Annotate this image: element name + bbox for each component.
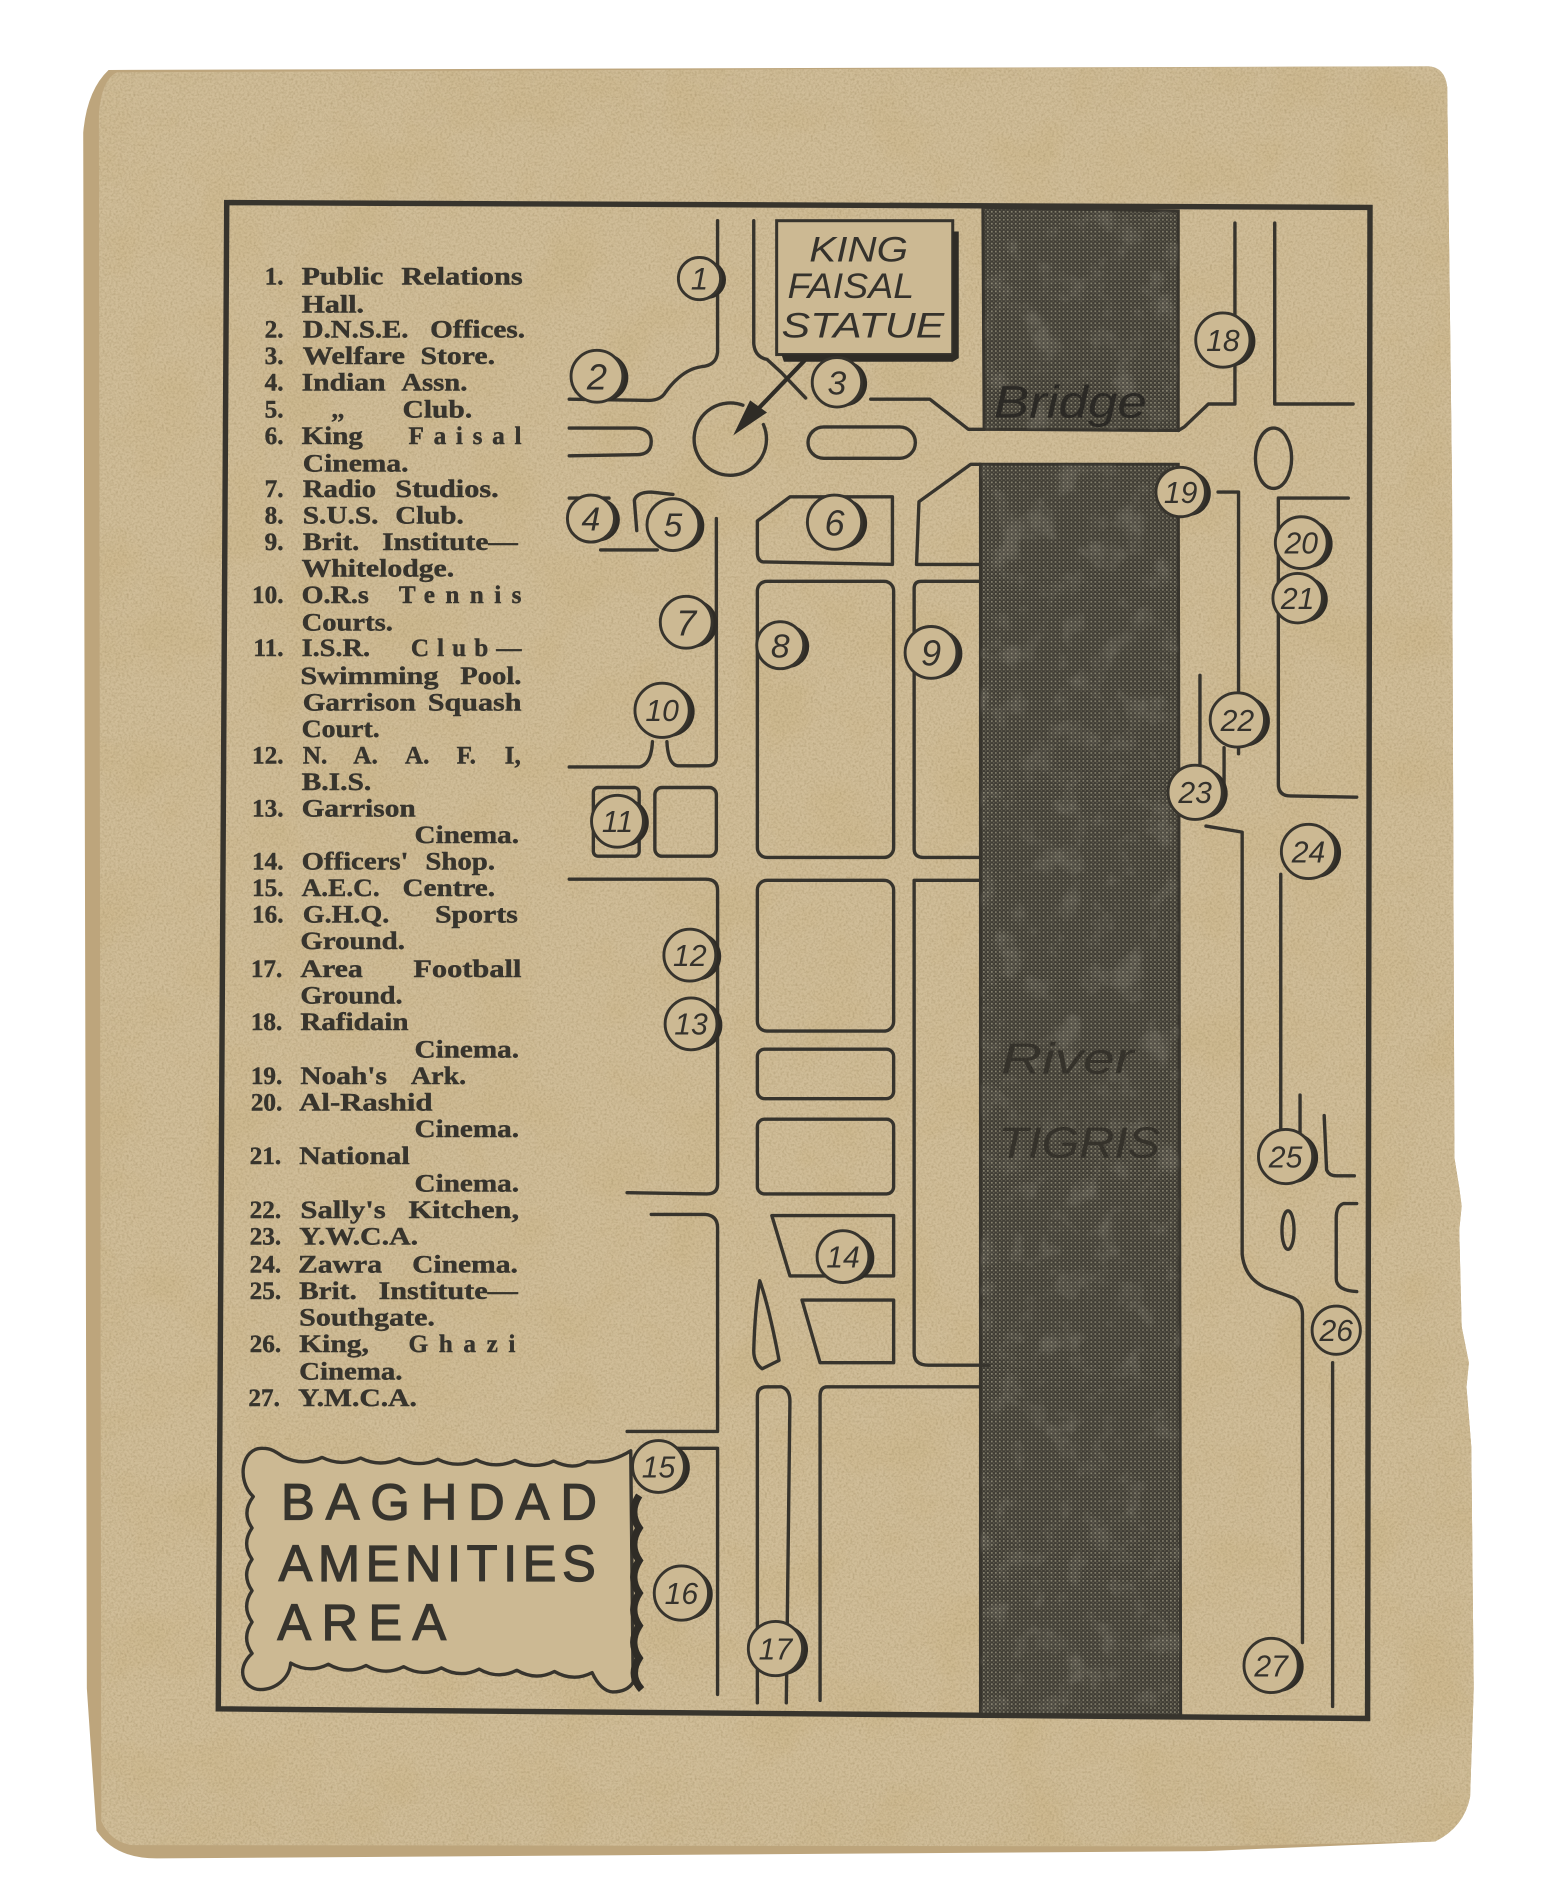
marker 7: 7: [676, 603, 698, 644]
marker 24: 24: [1291, 836, 1325, 869]
entry 9: Whitelodge.: [302, 554, 454, 582]
entry 21: Cinema.: [415, 1169, 519, 1198]
entry 1: Relations: [401, 263, 523, 291]
marker 12: [664, 929, 721, 981]
marker 24: [1281, 824, 1341, 879]
marker 23: 23: [1177, 777, 1212, 810]
legend of amenities: [248, 263, 525, 1412]
marker 3: 3: [828, 364, 847, 402]
entry 11: Club—: [411, 634, 522, 662]
marker 19: [1156, 467, 1211, 517]
entry 6: 6.: [265, 422, 284, 450]
entry 16: G.H.Q.: [303, 901, 389, 929]
marker 14: 14: [826, 1241, 860, 1274]
marker 20: 20: [1283, 528, 1318, 561]
marker 26: [1312, 1306, 1360, 1354]
entry 11: Pool.: [460, 662, 521, 690]
marker 4: 4: [582, 501, 600, 539]
entry 14: 14.: [252, 847, 284, 876]
marker 3: [812, 358, 867, 407]
marker 16: [654, 1566, 713, 1620]
marker 18: 18: [1206, 325, 1240, 358]
entry 19: Noah's: [300, 1062, 387, 1090]
marker 19: 19: [1164, 477, 1198, 510]
entry 19: 19.: [251, 1062, 282, 1090]
marker 10: [635, 683, 695, 737]
marker 6: 6: [824, 502, 845, 543]
entry 5: Club.: [403, 395, 472, 423]
entry 27: Y.M.C.A.: [298, 1384, 417, 1412]
entry 13: Cinema.: [415, 821, 519, 849]
river wear marks: [977, 205, 1188, 1722]
entry 17: Football: [413, 955, 521, 983]
King Faisal Statue sign: [777, 221, 959, 362]
entry 7: 7.: [265, 475, 284, 503]
marker 13: 13: [674, 1009, 708, 1042]
marker 1: 1: [691, 261, 708, 296]
marker 8: [757, 622, 809, 669]
entry 10: Tennis: [399, 581, 522, 609]
marker 17: [748, 1621, 808, 1676]
entry 20: 20.: [251, 1089, 282, 1117]
entry 3: 3.: [265, 342, 284, 370]
entry 5: ,,: [332, 395, 344, 423]
arrow to King Faisal statue: [733, 359, 806, 435]
entry 25: 25.: [250, 1277, 281, 1305]
entry 9: 9.: [265, 528, 284, 556]
entry 26: Cinema.: [299, 1358, 403, 1386]
marker 17: 17: [759, 1633, 793, 1666]
entry 18: Cinema.: [415, 1036, 519, 1064]
marker 21: [1273, 573, 1328, 623]
entry 11: Swimming: [300, 662, 439, 690]
entry 14: Shop.: [425, 847, 495, 876]
entry 12: F.: [457, 741, 476, 769]
entry 21: National: [299, 1142, 410, 1170]
marker 27: [1244, 1638, 1304, 1693]
King Faisal Statue sign: FAISAL: [788, 267, 914, 306]
entry 4: Indian: [302, 369, 386, 397]
entry 11: Court.: [302, 715, 380, 743]
entry 8: 8.: [265, 501, 284, 529]
title box: Baghdad Amenities Area: AREA: [277, 1594, 446, 1651]
marker 9: 9: [921, 633, 941, 674]
entry 12: I,: [505, 741, 521, 769]
entry 2: Offices.: [430, 316, 525, 344]
street map lines: [569, 221, 1357, 1706]
entry 25: Institute—: [378, 1277, 519, 1305]
marker 13: [665, 998, 722, 1050]
marker 6: [807, 495, 867, 549]
marker 1: [678, 257, 726, 300]
entry 17: 17.: [251, 955, 282, 983]
entry 16: Ground.: [300, 927, 405, 955]
river Tigris lower section: [980, 464, 1181, 1717]
entry 6: Cinema.: [303, 449, 409, 478]
marker 5: [647, 499, 704, 551]
entry 12: B.I.S.: [302, 768, 371, 796]
marker 16: 16: [665, 1578, 698, 1611]
label: River: River: [1001, 1035, 1136, 1083]
title box: Baghdad Amenities Area: AMENITIES: [279, 1535, 596, 1592]
entry 25: Brit.: [299, 1277, 357, 1305]
entry 7: Radio: [303, 475, 376, 503]
entry 19: Ark.: [411, 1062, 466, 1090]
entry 22: Sally's: [300, 1196, 386, 1224]
marker 18: [1196, 313, 1255, 367]
entry 3: Welfare: [303, 342, 405, 370]
entry 12: A.: [353, 741, 378, 769]
entry 2: 2.: [265, 316, 284, 344]
entry 21: 21.: [250, 1142, 281, 1170]
marker 14: [817, 1231, 874, 1283]
entry 8: Club.: [395, 501, 464, 529]
marker 15: [633, 1441, 690, 1492]
entry 20: Cinema.: [415, 1115, 519, 1143]
entry 23: 23.: [250, 1223, 281, 1251]
marker 27: 27: [1253, 1650, 1289, 1683]
marker 26: 26: [1318, 1315, 1353, 1348]
entry 11: 11.: [253, 634, 284, 662]
entry 15: Centre.: [403, 874, 495, 902]
entry 11: Garrison: [303, 688, 416, 716]
marker 10: 10: [645, 695, 679, 728]
entry 24: 24.: [250, 1250, 281, 1278]
entry 4: Assn.: [401, 369, 467, 397]
entry 17: Area: [300, 955, 363, 983]
entry 14: Officers': [302, 847, 409, 876]
entry 22: Kitchen,: [409, 1196, 519, 1224]
entry 24: Cinema.: [412, 1250, 518, 1278]
marker 25: 25: [1268, 1141, 1303, 1174]
entry 6: King: [302, 422, 363, 450]
entry 11: Squash: [428, 688, 521, 716]
entry 16: Sports: [435, 901, 518, 929]
marker 7: [660, 596, 718, 648]
entry 4: 4.: [265, 369, 284, 397]
entry 27: 27.: [248, 1384, 280, 1412]
entry 26: Ghazi: [409, 1330, 515, 1358]
map outer frame: [218, 203, 1370, 1719]
marker 2: [571, 350, 628, 402]
entry 6: Faisal: [409, 422, 521, 450]
entry 1: 1.: [265, 263, 284, 291]
entry 12: 12.: [252, 741, 284, 769]
entry 17: Ground.: [300, 981, 403, 1009]
entry 7: Studios.: [395, 475, 499, 503]
label: Bridge: Bridge: [994, 376, 1147, 427]
marker 12: 12: [673, 940, 707, 973]
entry 2: D.N.S.E.: [303, 316, 409, 344]
marker 22: [1210, 693, 1270, 747]
marker 21: 21: [1280, 583, 1314, 616]
marker 11: 11: [602, 806, 633, 839]
entry 15: A.E.C.: [302, 874, 380, 902]
marker 25: [1258, 1129, 1318, 1184]
entry 9: Institute—: [382, 528, 519, 556]
title box: Baghdad Amenities Area: [243, 1448, 642, 1692]
marker 8: 8: [771, 627, 790, 665]
label: Tigris: TIGRIS: [999, 1120, 1160, 1168]
marker 20: [1275, 517, 1333, 569]
entry 12: A.: [405, 741, 429, 769]
entry 23: Y.W.C.A.: [299, 1223, 418, 1251]
entry 10: 10.: [252, 581, 284, 609]
entry 13: 13.: [252, 794, 284, 822]
entry 5: 5.: [265, 395, 284, 423]
King Faisal Statue sign: KING: [809, 231, 908, 270]
marker 15: 15: [642, 1451, 675, 1484]
entry 20: Al-Rashid: [299, 1089, 433, 1117]
entry 1: Public: [302, 263, 383, 291]
entry 10: Courts.: [302, 609, 393, 637]
marker 11: [592, 795, 649, 847]
title box: Baghdad Amenities Area: BAGHDAD: [281, 1474, 597, 1531]
river Tigris upper section: [983, 207, 1178, 431]
entry 18: 18.: [251, 1008, 282, 1036]
entry 15: 15.: [252, 874, 284, 902]
marker 4: [567, 495, 620, 542]
entry 18: Rafidain: [300, 1008, 409, 1036]
entry 8: S.U.S.: [303, 501, 378, 529]
entry 16: 16.: [252, 901, 284, 929]
King Faisal Statue sign: STATUE: [781, 307, 945, 346]
entry 11: I.S.R.: [302, 634, 370, 662]
entry 3: Store.: [421, 342, 495, 370]
entry 9: Brit.: [303, 528, 359, 556]
entry 1: Hall.: [302, 290, 364, 318]
marker 9: [905, 627, 962, 678]
marker 22: 22: [1220, 705, 1254, 738]
entry 24: Zawra: [298, 1250, 383, 1278]
entry 13: Garrison: [302, 794, 416, 822]
entry 25: Southgate.: [299, 1303, 435, 1331]
marker 5: 5: [664, 507, 683, 545]
entry 26: 26.: [250, 1330, 281, 1358]
marker 23: [1168, 765, 1228, 819]
entry 10: O.R.s: [302, 581, 369, 609]
entry 26: King,: [299, 1330, 369, 1358]
marker 2: 2: [586, 357, 607, 398]
entry 12: N.: [303, 741, 327, 769]
entry 22: 22.: [250, 1196, 281, 1224]
